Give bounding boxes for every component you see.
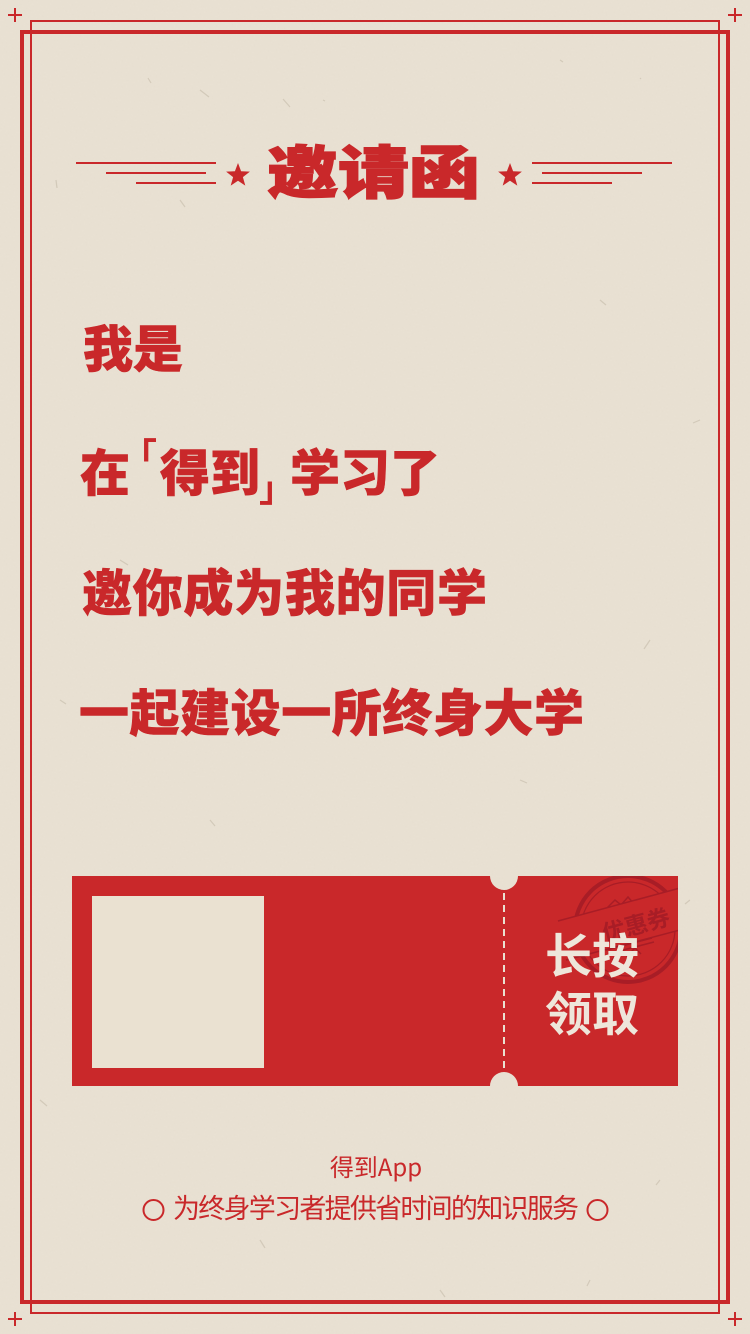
title decoration: right lines and star (498, 162, 672, 186)
invitation text line 3: 邀你成为我的同学 (82, 554, 487, 626)
title decoration: left lines and star (76, 162, 250, 186)
invitation text line 2: 」 (259, 460, 295, 512)
invitation text line 2 (80, 428, 440, 512)
coupon ticket: 领取 (545, 976, 639, 1045)
invitation text line 4: 一起建设一所终身大学 (79, 674, 584, 746)
invitation text line 2: 得到 (160, 434, 260, 506)
title: 邀请函 (267, 127, 480, 210)
footer: slogan: 为终身学习者提供省时间的知识服务 (173, 1187, 579, 1226)
stamp: coupon seal (558, 876, 681, 982)
call to action: 长按 (545, 918, 639, 987)
invitation text line 2: 在 (80, 434, 130, 506)
footer: brand: 得到App (330, 1148, 422, 1183)
invitation text line 2: 「 (121, 428, 157, 480)
invitation text line 2: 学习了 (290, 434, 440, 506)
stamp: coupon seal: 优惠券 (598, 898, 673, 949)
perforation dashed line (503, 893, 505, 1070)
ticket body (72, 876, 678, 1086)
invitation text line 1: 我是 (83, 310, 183, 382)
QR code placeholder (92, 896, 264, 1068)
coupon ticket (72, 876, 681, 1086)
